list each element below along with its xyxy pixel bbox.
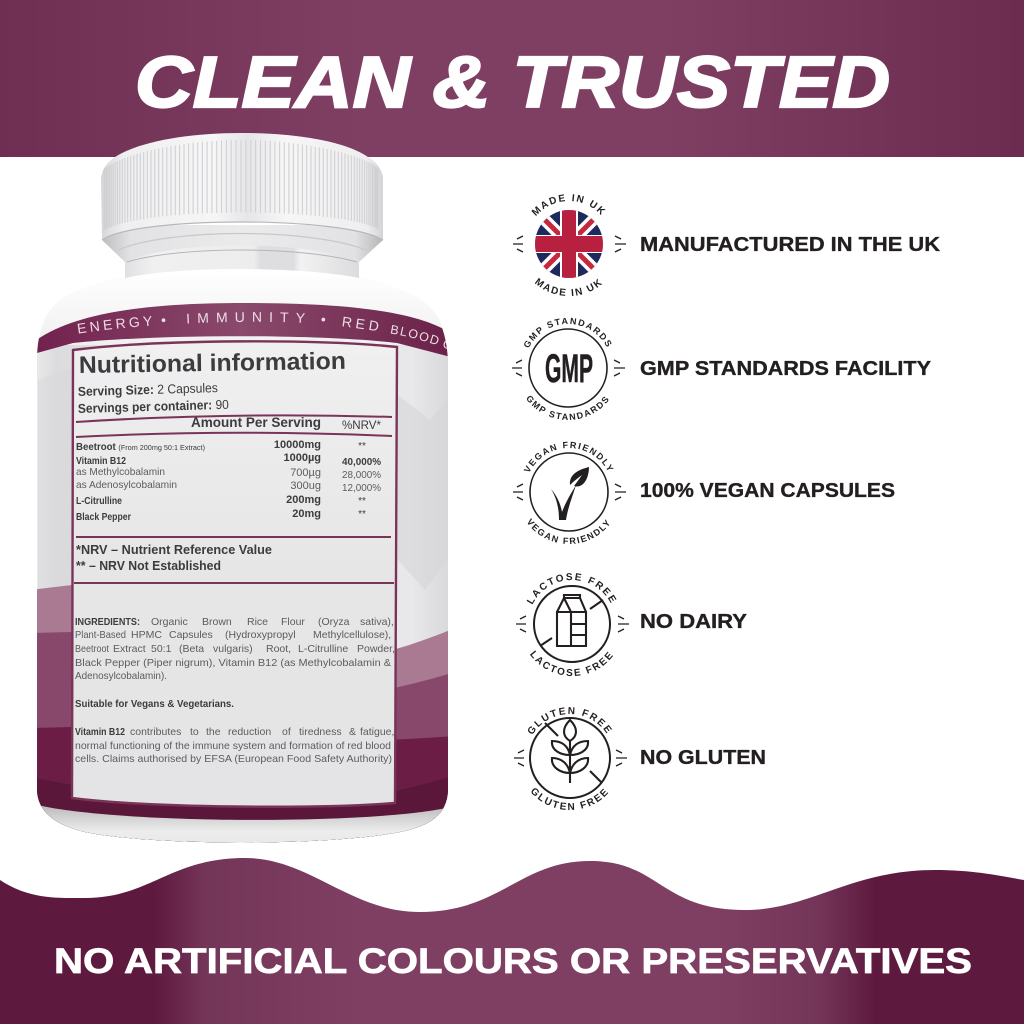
nutrient rows: 1000µg	[283, 452, 321, 464]
vitamin claim: tiredness	[299, 726, 342, 738]
ingredients: INGREDIENTS:	[75, 616, 140, 628]
vitamin claim: reduction	[228, 726, 271, 738]
bottle cap	[101, 133, 383, 240]
ingredients: (Oryza	[318, 616, 350, 628]
table header: Amount Per Serving	[191, 415, 321, 430]
badge: vegan friendly	[513, 442, 626, 544]
badge text: VEGAN FRIENDLY	[528, 518, 610, 544]
badge text	[524, 318, 612, 420]
band text: C	[444, 340, 447, 349]
nutrient rows: as Adenosylcobalamin	[76, 479, 177, 491]
vitamin claim: normal functioning of the immune system and formation of red blood	[75, 740, 391, 752]
UK flag	[535, 210, 603, 278]
ingredients: L-Citrulline	[298, 643, 348, 655]
label: GMP: GMP STANDARDS FACILITY	[640, 358, 932, 380]
bottle neck	[125, 240, 359, 278]
GMP wordmark: GMP	[545, 347, 593, 391]
nutrition label	[72, 341, 397, 807]
vitamin claim: fatigue,	[360, 726, 394, 738]
ingredients: 50:1	[151, 643, 172, 655]
serving info	[78, 380, 229, 416]
title: CLEAN & TRUSTED	[135, 43, 890, 123]
serving info: Serving Size: 2 Capsules	[78, 380, 218, 399]
ingredients: Powder,	[357, 643, 395, 655]
ingredients: vulgaris)	[213, 643, 253, 655]
under-cap rim	[102, 225, 383, 262]
ingredients: Black Pepper (Piper nigrum), Vitamin B12 (as Methylcobalamin &	[75, 657, 391, 669]
ingredients: Organic	[151, 616, 188, 628]
badge: gluten free	[514, 707, 627, 810]
vitamin claim: Vitamin B12	[75, 726, 125, 738]
ingredients: Capsules	[169, 629, 213, 641]
vitamin claim: to	[190, 726, 199, 738]
label panel	[72, 341, 397, 807]
neck ring	[127, 250, 357, 262]
nutrient rows: 28,000%	[342, 469, 381, 481]
ingredients: Root,	[266, 643, 291, 655]
nutrient rows: **	[358, 441, 366, 452]
ingredients: Rice	[247, 616, 268, 628]
ingredients: (Beta	[179, 643, 204, 655]
nutrient rows: 300ug	[290, 480, 321, 492]
serving info: Servings per container: 90	[78, 397, 229, 416]
nutrient rows: 12,000%	[342, 482, 381, 494]
supplement bottle	[37, 133, 448, 842]
header band	[0, 0, 1024, 157]
badge text: MADE IN UK	[534, 278, 602, 296]
badge text: MADE IN UK	[531, 194, 606, 216]
nutrient rows: Beetroot (From 200mg 50:1 Extract)	[76, 442, 205, 453]
ingredients: (Hydroxypropyl	[225, 629, 296, 641]
ingredients: Extract	[113, 643, 146, 655]
band text: IMMUNITY	[187, 312, 305, 324]
cap ribs	[104, 140, 378, 230]
footer text: NO ARTIFICIAL COLOURS OR PRESERVATIVES	[54, 942, 972, 981]
badge text	[531, 194, 606, 296]
ingredients: sativa),	[360, 616, 394, 628]
ingredients: Brown	[202, 616, 232, 628]
table header	[191, 415, 381, 432]
vitamin claim: contributes	[130, 726, 181, 738]
vitamin claim: of	[282, 726, 291, 738]
ingredients: Adenosylcobalamin).	[75, 670, 167, 682]
nutrient rows: L-Citrulline	[76, 496, 122, 507]
nutrient rows: Black Pepper	[76, 512, 131, 523]
band text: ENERGY	[78, 316, 152, 334]
label: no gluten: NO GLUTEN	[640, 747, 766, 769]
ingredients: Methylcellulose),	[313, 629, 391, 641]
badge: made in UK	[513, 194, 626, 296]
cap lip	[102, 222, 383, 240]
nutrient rows: 10000mg	[274, 439, 321, 451]
vitamin claim	[75, 726, 394, 765]
nutrient rows: as Methylcobalamin	[76, 466, 165, 478]
badge text	[524, 442, 614, 544]
nutrient rows: 700µg	[290, 467, 321, 479]
footer wave band	[0, 858, 1024, 1024]
nutrient rows: 200mg	[286, 494, 321, 506]
vitamin claim: cells. Claims authorised by EFSA (European Food Safety Authority)	[75, 753, 392, 765]
icon: vegan leaf check	[551, 467, 589, 520]
badge text: GMP STANDARDS	[527, 396, 608, 420]
suitable note: Suitable for Vegans & Vegetarians.	[75, 698, 234, 710]
nutrient rows	[76, 439, 382, 523]
nutrient rows: **	[358, 496, 366, 507]
badge text: LACTOSE FREE	[530, 650, 613, 676]
band text: BLOOD	[390, 325, 438, 344]
label: no dairy: NO DAIRY	[640, 611, 748, 633]
NRV notes: *NRV – Nutrient Reference Value	[76, 542, 272, 557]
badge text: GLUTEN FREE	[528, 707, 612, 734]
badge: lactose free	[516, 573, 629, 676]
badge text: VEGAN FRIENDLY	[524, 442, 614, 472]
table header: %NRV*	[342, 418, 381, 432]
badge: GMP standards	[512, 318, 625, 420]
ingredients	[75, 616, 395, 682]
vitamin claim: the	[206, 726, 221, 738]
ingredients: Plant-Based	[75, 629, 126, 641]
band text: RED	[342, 316, 378, 330]
NRV notes	[76, 542, 272, 573]
nutrient rows: 40,000%	[342, 456, 382, 468]
band text	[78, 312, 447, 349]
nutrition heading: Nutritional information	[79, 348, 346, 379]
icon: wheat	[545, 720, 602, 783]
label: vegan: 100% VEGAN CAPSULES	[640, 480, 895, 502]
bottle body	[37, 282, 448, 842]
label: manufactured: MANUFACTURED IN THE UK	[640, 234, 941, 256]
badge text: GMP STANDARDS	[524, 318, 612, 348]
NRV notes: ** – NRV Not Established	[76, 558, 221, 573]
nutrient rows: Vitamin B12	[76, 456, 126, 467]
nutrient rows: **	[358, 509, 366, 520]
icon: milk carton	[540, 595, 603, 646]
badge text	[526, 573, 616, 676]
badge text	[528, 707, 612, 810]
nutrient rows: 20mg	[292, 508, 321, 520]
band text: •	[321, 318, 326, 322]
ingredients: Flour	[281, 616, 305, 628]
badge text: GLUTEN FREE	[532, 788, 608, 810]
band text: •	[162, 318, 166, 322]
badge text: LACTOSE FREE	[526, 573, 616, 604]
ingredients: HPMC	[131, 629, 162, 641]
ingredients: Beetroot	[75, 643, 109, 655]
vitamin claim: &	[349, 726, 356, 738]
